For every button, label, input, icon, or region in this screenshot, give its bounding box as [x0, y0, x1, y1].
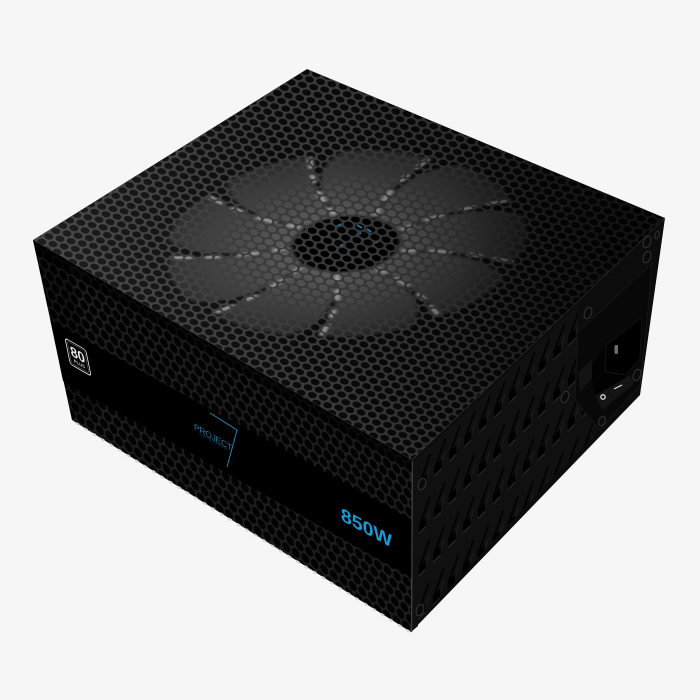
screws on back face	[415, 231, 660, 617]
wattage label: 850W: 850W	[341, 504, 392, 553]
logo: PROJECT with blue bracket: PROJECT	[194, 422, 232, 453]
fan: blades seen through mesh	[167, 150, 526, 338]
icon: power switch	[596, 375, 634, 410]
panel: top mesh face with fan beneath	[33, 69, 665, 460]
panel: recessed connector plate	[575, 263, 652, 430]
infographic: PSU product illustration	[33, 69, 665, 632]
bottom edge notches	[76, 423, 410, 632]
panel: black label band	[50, 321, 412, 578]
logo: PROJECT with blue bracket	[194, 413, 237, 467]
panel: right back face with vents	[411, 218, 665, 632]
icon: AC power socket	[578, 317, 642, 392]
icon: 80 PLUS badge	[65, 338, 91, 376]
perforated mesh plate	[34, 69, 665, 460]
logo: PROJECT with blue bracket: powering your system	[199, 431, 228, 452]
lighting gradient: dark	[356, 110, 665, 459]
icon: 80 PLUS badge: 80	[69, 343, 87, 368]
lighting gradient: light	[34, 148, 206, 340]
panel: left side face with mesh	[33, 240, 412, 632]
fan hub blue marks	[337, 224, 379, 246]
icon: 80 PLUS badge: PLUS	[73, 358, 86, 371]
